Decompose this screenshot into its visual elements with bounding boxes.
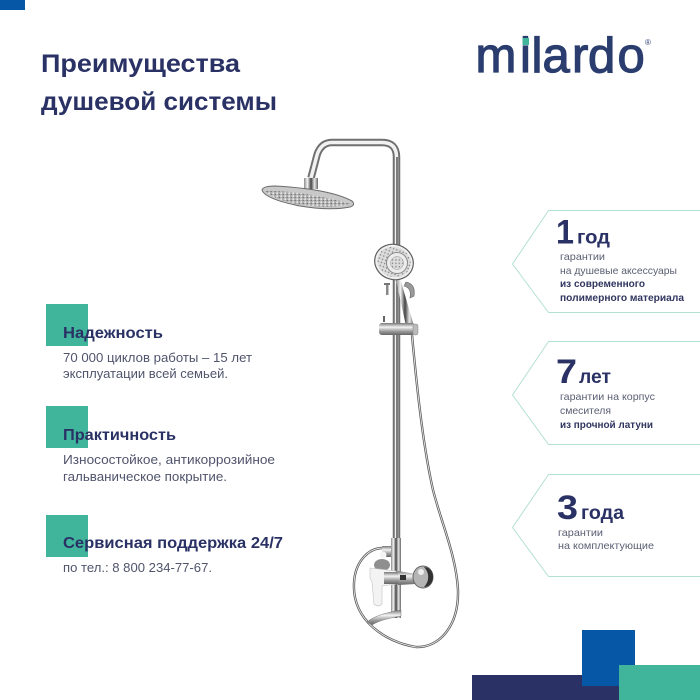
accent square <box>46 515 88 557</box>
heading: Сервисная поддержка 24/7 <box>63 535 283 552</box>
description: из прочной латуни <box>560 419 653 431</box>
shower riser pipe <box>311 142 396 617</box>
number: 7 <box>556 353 577 391</box>
accent square <box>46 406 88 448</box>
description: из современного <box>560 278 645 290</box>
panel: 3 years warranty <box>512 474 700 576</box>
number: 1 <box>556 214 574 252</box>
logo: milardo: ® <box>645 38 651 47</box>
title: душевой системы <box>41 88 277 116</box>
panel: practicality <box>46 406 275 484</box>
decorative colour blocks <box>472 630 700 700</box>
description <box>560 391 655 431</box>
description: гарантии <box>558 527 603 539</box>
description: Износостойкое, антикоррозийное <box>63 452 275 467</box>
accent square <box>46 304 88 346</box>
flexible hose <box>354 335 458 647</box>
slide bracket <box>379 316 418 335</box>
heading: Надежность <box>63 325 163 342</box>
description: гарантии на корпус <box>560 391 655 403</box>
hand shower <box>370 239 418 326</box>
heading: Практичность <box>63 427 176 444</box>
overhead shower head <box>262 178 354 209</box>
unit: лет <box>579 367 611 388</box>
panel: 7 years warranty <box>512 342 700 444</box>
description: эксплуатации всей семьей. <box>63 366 228 381</box>
description: по тел.: 8 800 234-77-67. <box>63 560 212 575</box>
description: на душевые аксессуары <box>560 265 677 277</box>
description: гарантии <box>560 251 605 263</box>
hexagon frame <box>512 474 700 576</box>
description: 70 000 циклов работы – 15 лет <box>63 350 252 365</box>
title <box>41 50 277 116</box>
description: полимерного материала <box>560 292 684 304</box>
unit: года <box>581 503 624 524</box>
description <box>63 452 275 484</box>
hexagon frame <box>512 210 700 312</box>
description <box>558 527 654 552</box>
description: гальваническое покрытие. <box>63 469 227 484</box>
description <box>63 350 252 381</box>
hexagon frame <box>512 342 700 444</box>
title: Преимущества <box>41 50 241 78</box>
panel: 1 year warranty <box>512 210 700 312</box>
description: смесителя <box>560 405 611 417</box>
panel: service support <box>46 515 283 575</box>
description: на комплектующие <box>558 540 654 552</box>
panel: reliability <box>46 304 252 381</box>
decorative corner square <box>0 0 25 10</box>
mixer with spout <box>367 538 433 625</box>
shower system illustration <box>262 142 458 647</box>
number: 3 <box>557 489 578 527</box>
description <box>560 251 684 304</box>
logo: milardo: milardo <box>476 29 645 83</box>
unit: год <box>577 228 610 248</box>
